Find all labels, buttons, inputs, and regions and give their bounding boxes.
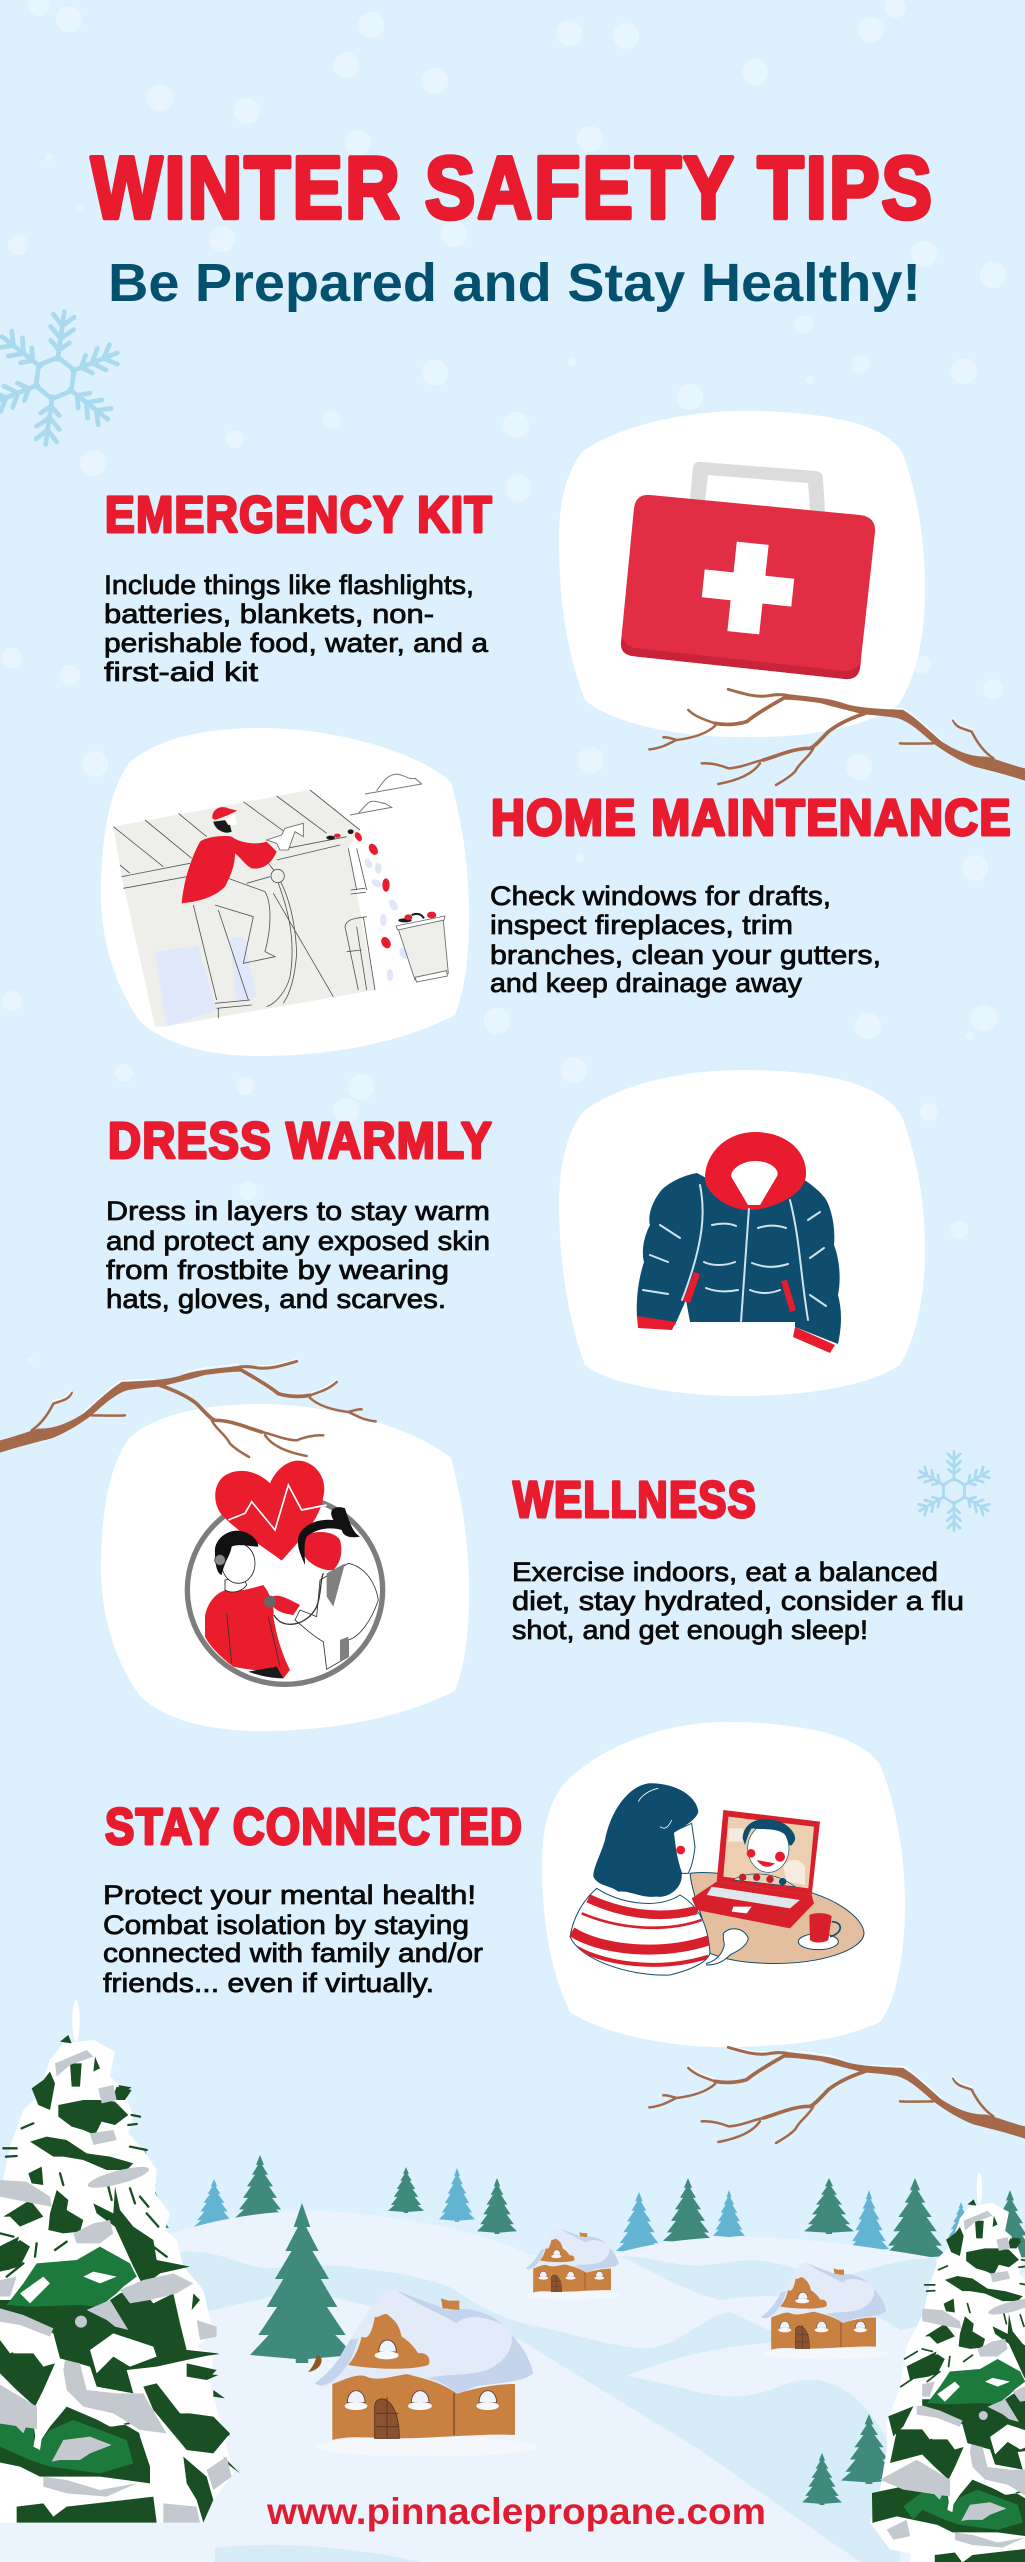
house small <box>526 2228 620 2300</box>
text: stay connected body: friends... even if virtually. <box>103 1968 434 1998</box>
text: wellness body: diet, stay hydrated, consider a flu <box>512 1586 964 1616</box>
illustration: woman on video call <box>570 1783 864 1975</box>
panel: dress warmly image <box>559 1070 925 1396</box>
heading: wellness: WELLNESS <box>513 1471 757 1528</box>
distant pine trees <box>110 2150 1025 2270</box>
panel: emergency kit image <box>559 411 925 737</box>
text: wellness body: Exercise indoors, eat a balanced <box>512 1557 938 1587</box>
text: home maintenance body: branches, clean your gutters, <box>490 940 881 970</box>
pine trees lower right <box>802 2414 897 2505</box>
text: stay connected body: Combat isolation by staying <box>103 1910 469 1940</box>
text: emergency kit body: batteries, blankets, non- <box>104 599 434 629</box>
text: emergency kit body: first-aid kit <box>104 657 259 687</box>
heading: emergency kit: EMERGENCY KIT <box>105 486 493 543</box>
panel: stay connected image <box>542 1722 905 2047</box>
text: home maintenance body: and keep drainage away <box>490 968 803 998</box>
website url: www.pinnaclepropane.com <box>266 2491 766 2532</box>
text: dress warmly body: hats, gloves, and scarves. <box>106 1284 446 1314</box>
icon: snowflake left <box>0 303 128 453</box>
branch top right <box>649 687 1025 785</box>
panel: home maintenance image <box>101 728 469 1056</box>
text: emergency kit body: perishable food, water, and a <box>104 628 489 658</box>
subtitle: Be Prepared and Stay Healthy! <box>108 253 921 313</box>
text: wellness body: shot, and get enough sleep! <box>512 1615 868 1645</box>
snowy tree left <box>0 2000 240 2523</box>
text: stay connected body: Protect your mental health! <box>103 1880 476 1910</box>
text: dress warmly body <box>106 1196 490 1314</box>
hill shading <box>176 2251 900 2562</box>
house large <box>315 2288 537 2457</box>
text: wellness body <box>512 1557 964 1645</box>
text: dress warmly body: from frostbite by wearing <box>106 1255 449 1285</box>
text: emergency kit body <box>104 570 489 687</box>
illustration: man cleaning gutter <box>113 774 448 1027</box>
illustration: doctor and patient <box>187 1461 383 1684</box>
snowy tree right <box>870 2173 1025 2562</box>
snowy hills <box>0 2211 1025 2562</box>
branch bottom right <box>649 2045 1025 2143</box>
text: emergency kit body: Include things like flashlights, <box>104 570 474 600</box>
text: home maintenance body: inspect fireplaces, trim <box>490 910 793 940</box>
text: dress warmly body: Dress in layers to stay warm <box>106 1196 490 1226</box>
heading: stay connected: STAY CONNECTED <box>105 1798 523 1855</box>
panel: wellness image <box>101 1404 469 1731</box>
text: home maintenance body <box>490 881 881 998</box>
text: dress warmly body: and protect any exposed skin <box>106 1226 490 1256</box>
scene: winter village <box>0 2000 1025 2562</box>
icon: snowflake right <box>916 1451 992 1531</box>
text: home maintenance body: Check windows for drafts, <box>490 881 831 911</box>
icon: puffer jacket <box>637 1132 841 1353</box>
icon: first aid kit <box>621 462 875 679</box>
house medium <box>761 2262 888 2359</box>
text: stay connected body <box>103 1880 483 1998</box>
heading: dress warmly: DRESS WARMLY <box>108 1112 493 1169</box>
upper right hill shading <box>621 2256 950 2330</box>
foreground pine tree <box>250 2203 354 2363</box>
text: stay connected body: connected with family and/or <box>103 1938 483 1968</box>
bottom shading <box>215 2545 420 2562</box>
branch left <box>0 1359 376 1457</box>
falling snow dots <box>2 0 1006 1363</box>
